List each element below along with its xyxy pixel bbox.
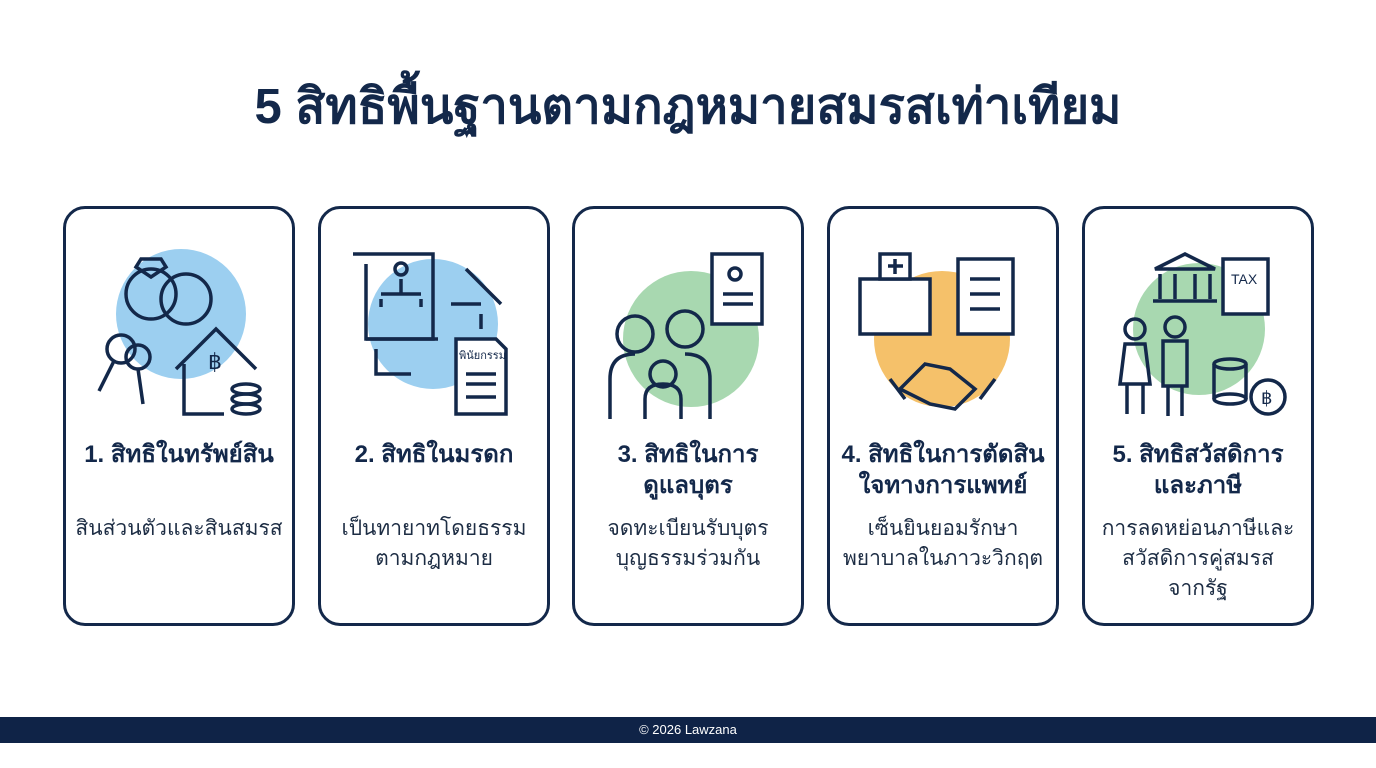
- panel: inheritance: [318, 206, 550, 626]
- description: บุญธรรมร่วมกัน: [616, 547, 760, 570]
- heading: ใจทางการแพทย์: [859, 472, 1027, 499]
- heading: [1112, 441, 1284, 499]
- heading: 4. สิทธิในการตัดสิน: [841, 441, 1045, 468]
- panel: child care: [572, 206, 804, 626]
- description: [342, 516, 526, 570]
- description: จดทะเบียนรับบุตร: [607, 517, 769, 540]
- description: สินส่วนตัวและสินสมรส: [75, 517, 283, 540]
- icon: scroll gavel will: [353, 252, 508, 416]
- description: เป็นทายาทโดยธรรม: [342, 517, 526, 540]
- heading: 3. สิทธิในการ: [618, 441, 758, 468]
- description: [843, 516, 1043, 570]
- description: การลดหย่อนภาษีและ: [1102, 517, 1294, 540]
- heading: 2. สิทธิในมรดก: [355, 441, 513, 468]
- heading: และภาษี: [1154, 472, 1242, 499]
- panel: medical: [827, 206, 1059, 626]
- icon: bank tax coins: [1118, 252, 1287, 416]
- heading: [841, 440, 1045, 499]
- heading: ดูแลบุตร: [643, 472, 733, 499]
- description: [607, 517, 769, 571]
- heading: 5. สิทธิสวัสดิการ: [1112, 441, 1284, 468]
- heading: 1. สิทธิในทรัพย์สิน: [84, 441, 274, 468]
- description: เซ็นยินยอมรักษา: [868, 517, 1018, 540]
- description: จากรัฐ: [1168, 577, 1228, 600]
- description: พยาบาลในภาวะวิกฤต: [843, 547, 1043, 570]
- panel: welfare tax: [1082, 206, 1314, 626]
- icon: rings keys house: [98, 249, 262, 416]
- description: [1102, 517, 1294, 600]
- footer: [0, 717, 1376, 743]
- icon: hospital handshake: [858, 252, 1015, 411]
- description: ตามกฎหมาย: [375, 547, 493, 570]
- icon: family document: [608, 252, 764, 419]
- icon: scroll gavel will: พินัยกรรม: [459, 350, 506, 362]
- icon: bank tax coins: ฿: [1261, 388, 1272, 408]
- panel: property: [63, 206, 295, 626]
- icon: rings keys house: ฿: [208, 349, 222, 374]
- footer: © 2026 Lawzana: [639, 722, 737, 737]
- heading: [618, 440, 758, 500]
- icon: bank tax coins: TAX: [1231, 271, 1258, 287]
- title: 5 สิทธิพื้นฐานตามกฎหมายสมรสเท่าเทียม: [255, 80, 1121, 134]
- description: สวัสดิการคู่สมรส: [1122, 547, 1274, 570]
